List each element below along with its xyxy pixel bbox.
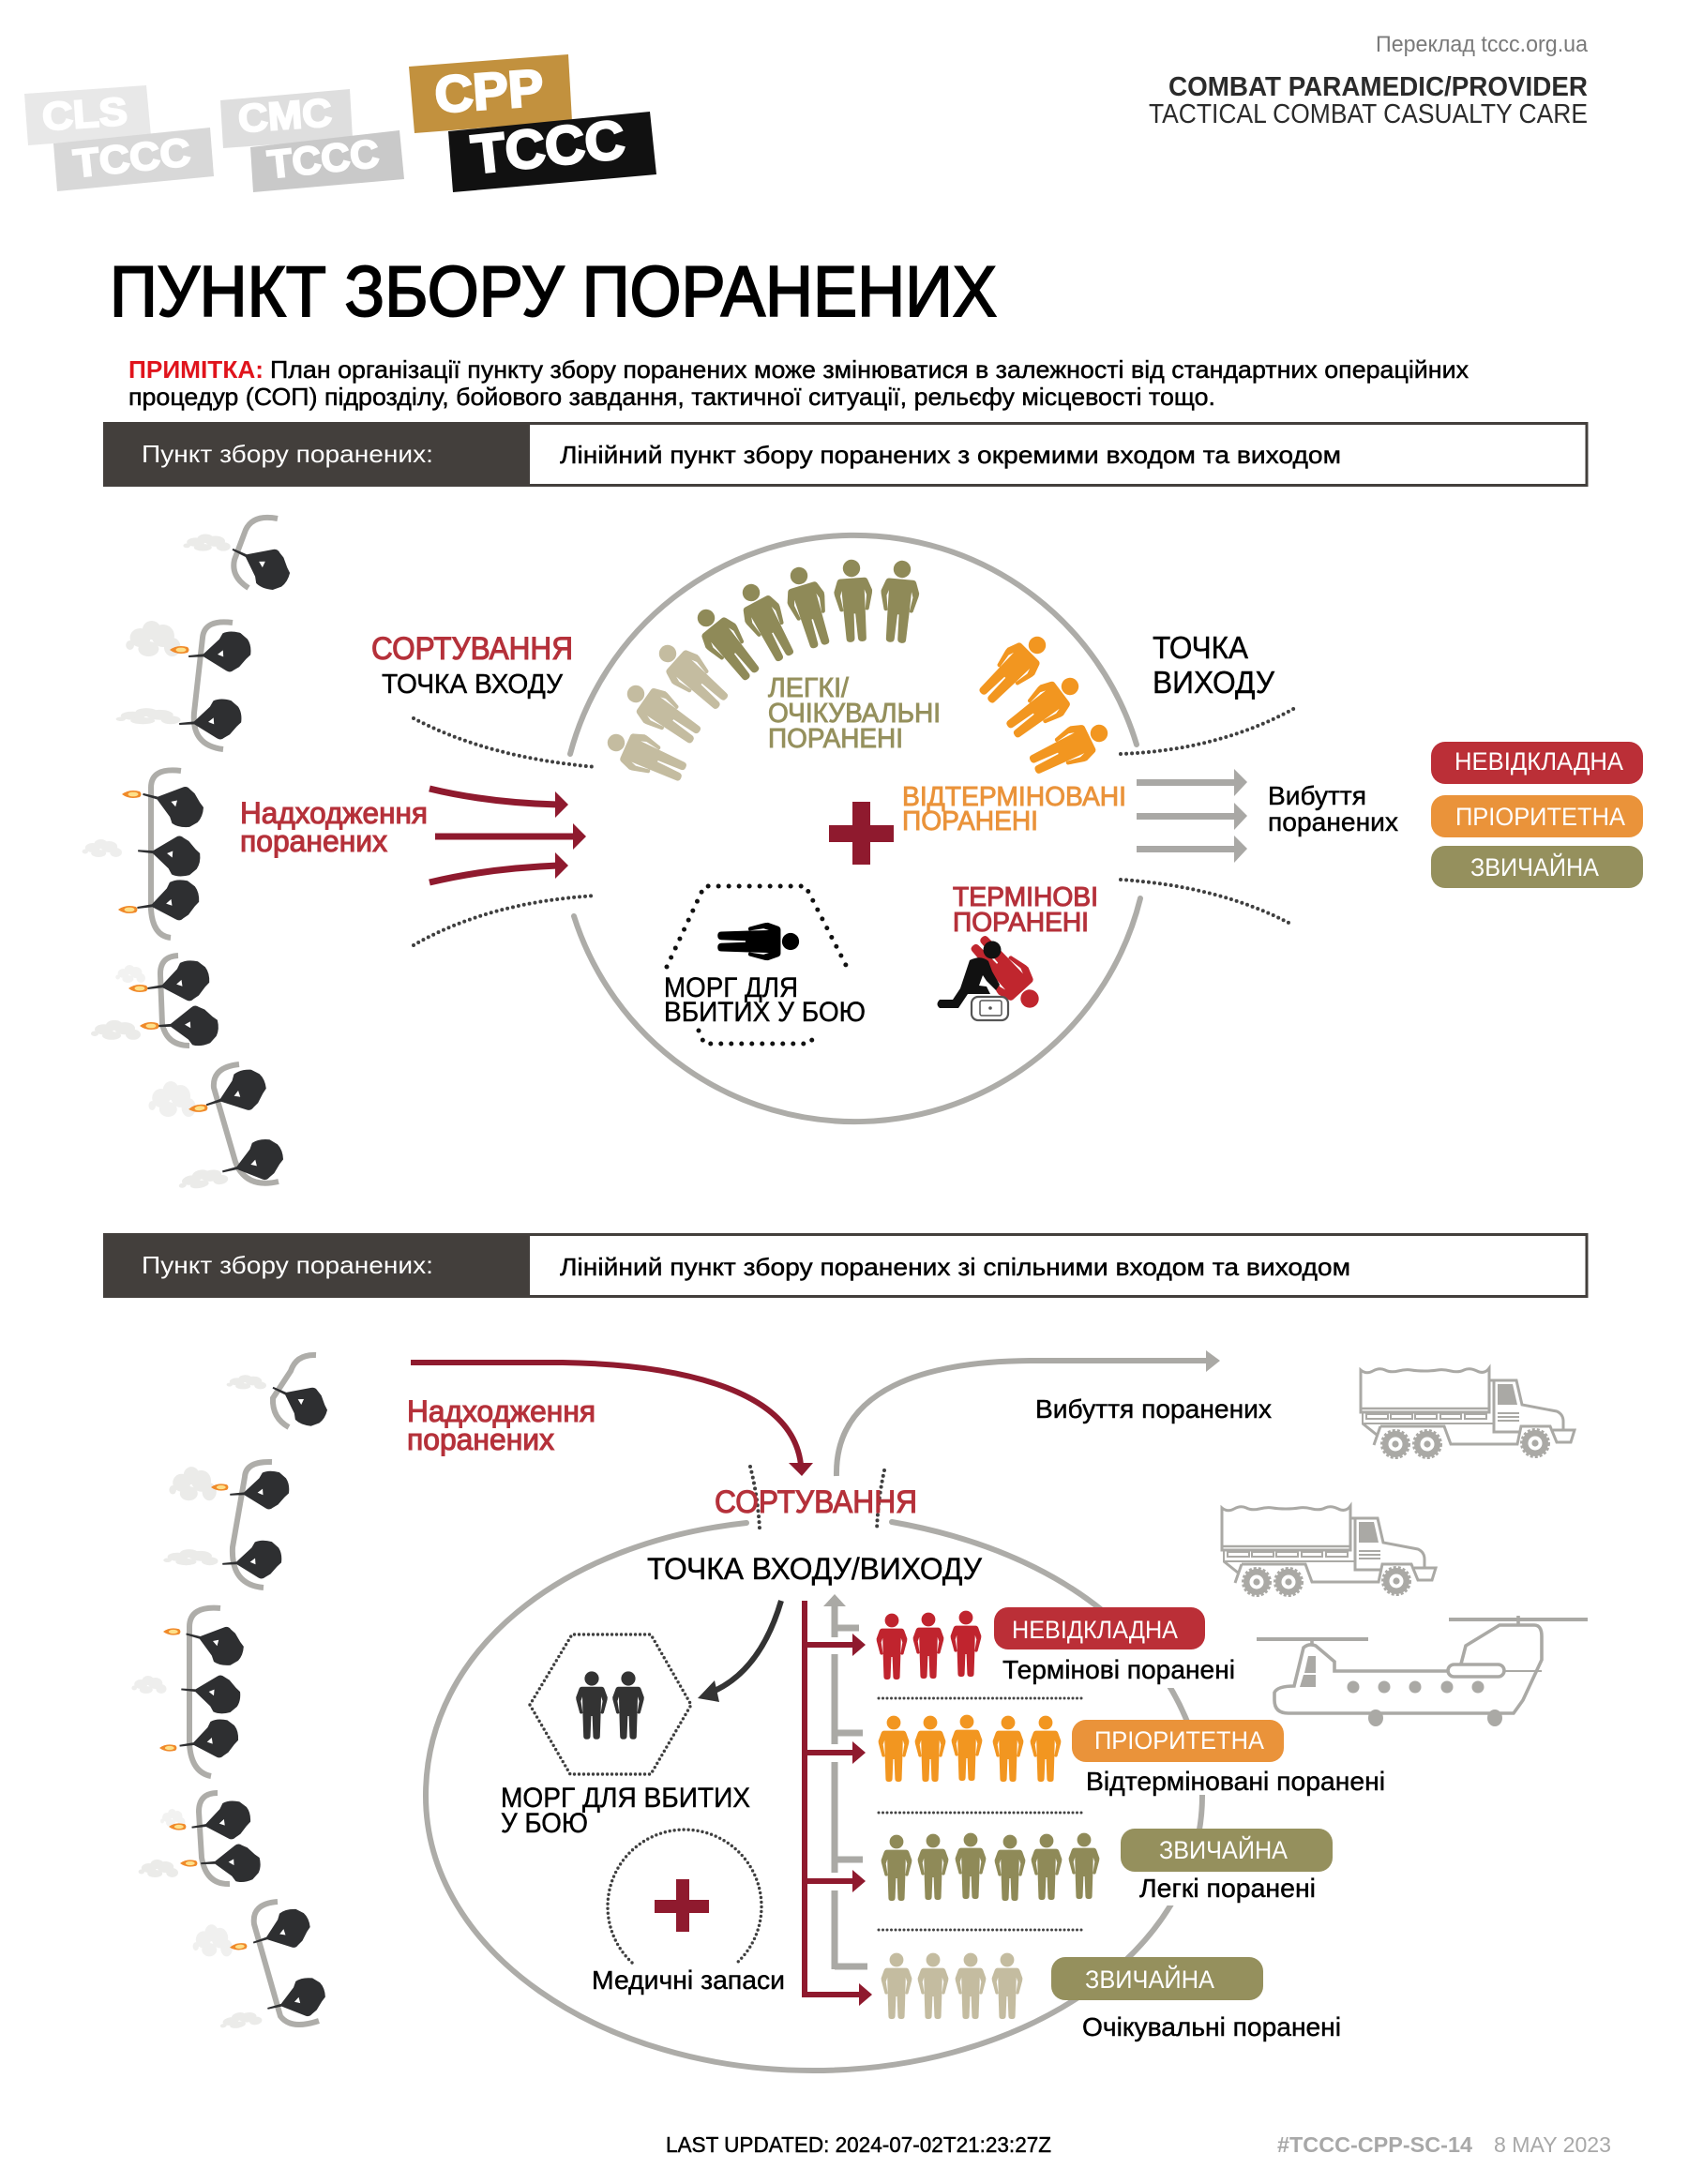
label: delayed: ПОРАНЕНІ — [902, 806, 1038, 836]
section header 1 — [103, 422, 1587, 487]
label: casualty arrival — [240, 796, 428, 858]
label: casualty arrival: поранених — [407, 1423, 554, 1456]
label: exit point: ТОЧКА — [1153, 630, 1248, 665]
label: casualty arrival: Надходження — [407, 1394, 595, 1428]
note: процедур (СОП) підрозділу, бойового завдання, тактичної ситуації, рельєфу місцевості тощо. — [128, 383, 1215, 411]
logo: CLS TCCC — [24, 85, 214, 191]
logo: CPP TCCC: TCCC — [469, 109, 627, 186]
note — [128, 355, 1469, 411]
logo: CMC TCCC — [220, 89, 404, 192]
label: immediate: ПОРАНЕНІ — [953, 908, 1089, 938]
footer: document id and date: 8 MAY 2023 — [1494, 2132, 1611, 2157]
icon: medical cross — [829, 802, 894, 865]
arrow: casualties leaving — [836, 1350, 1220, 1476]
morgue zone — [501, 1634, 750, 1839]
tag: priority: ПРІОРИТЕТНА — [1094, 1726, 1264, 1755]
logo: CPP TCCC — [409, 54, 656, 192]
morgue zone: ВБИТИХ У БОЮ — [664, 997, 866, 1028]
tag: priority — [1072, 1720, 1385, 1796]
footer: last updated: LAST UPDATED: 2024-07-02T21:23:27Z — [666, 2132, 1051, 2157]
icon: medic treating casualty — [938, 928, 1050, 1020]
logo: CPP TCCC: CPP — [433, 58, 546, 124]
label: triage entry point — [371, 631, 573, 700]
dotted entry lines — [414, 708, 1295, 945]
shooters, bottom section — [131, 1355, 334, 2031]
legend: evacuation priority: ПРІОРИТЕТНА — [1455, 803, 1625, 831]
label: minimal/expectant: ОЧІКУВАЛЬНІ — [768, 699, 941, 729]
vehicle: truck — [1361, 1368, 1575, 1457]
label: delayed — [902, 782, 1126, 836]
header: course title — [1149, 72, 1588, 129]
row: delayed casualties — [879, 1715, 1061, 1782]
circle: collection point boundary — [570, 535, 1140, 1122]
label: minimal/expectant: ЛЕГКІ/ — [768, 673, 850, 703]
figures: delayed casualties — [972, 625, 1115, 783]
dotted entry lines — [750, 1467, 884, 1530]
label: casualty departure: поранених — [1268, 807, 1398, 836]
label: triage entry point: СОРТУВАННЯ — [371, 631, 573, 667]
medical supplies zone: Медичні запаси — [592, 1966, 785, 1995]
tag: routine, minor: ЗВИЧАЙНА — [1159, 1835, 1288, 1864]
row dividers — [879, 1698, 1085, 1930]
legend: evacuation priority: ЗВИЧАЙНА — [1470, 852, 1599, 881]
label: exit point — [1153, 630, 1275, 700]
figures: minimal and expectant casualties — [600, 558, 922, 791]
logo: CLS TCCC: TCCC — [71, 129, 192, 186]
title: ПУНКТ ЗБОРУ ПОРАНЕНИХ — [110, 252, 997, 332]
note: План організації пункту збору поранених може змінюватися в залежності від стандартних операційних — [270, 355, 1469, 384]
row: immediate casualties — [877, 1611, 981, 1679]
note: ПРИМІТКА: — [128, 355, 264, 384]
section header 2: Пункт збору поранених: — [142, 1251, 433, 1279]
label: minimal/expectant — [768, 673, 941, 754]
label: exit point: ВИХОДУ — [1153, 665, 1275, 700]
logo: CMC TCCC: CMC — [236, 90, 333, 141]
tag: routine, minor: Легкі поранені — [1139, 1874, 1316, 1903]
label: casualty arrival: поранених — [240, 824, 387, 858]
footer: document id and date — [1277, 2132, 1611, 2157]
morgue zone: МОРГ ДЛЯ ВБИТИХ — [501, 1783, 750, 1814]
label: immediate — [953, 882, 1098, 938]
section header 2: Лінійний пункт збору поранених зі спільними входом та виходом — [560, 1253, 1350, 1281]
label: casualty departure: Вибуття — [1268, 781, 1366, 810]
vehicle: helicopter — [1257, 1616, 1588, 1726]
row: expectant casualties — [882, 1953, 1022, 2019]
medical supplies zone — [592, 1830, 785, 1995]
vehicle: truck — [1222, 1506, 1436, 1596]
label: entry/exit point: ТОЧКА ВХОДУ/ВИХОДУ — [647, 1552, 983, 1586]
arrows: casualties departing — [1137, 769, 1247, 863]
ellipse: collection point boundary — [426, 1522, 1202, 2071]
tag: immediate: НЕВІДКЛАДНА — [1012, 1616, 1178, 1644]
header: translation credit: Переклад tccc.org.ua — [1376, 32, 1589, 57]
label: triage entry point: ТОЧКА ВХОДУ — [382, 670, 564, 700]
header: course title: TACTICAL COMBAT CASUALTY CARE — [1149, 99, 1588, 129]
shooters, top section — [83, 518, 297, 1192]
tag: immediate: Термінові поранені — [1002, 1655, 1235, 1684]
morgue zone — [664, 886, 866, 1044]
arrow: casualties arriving — [411, 1363, 813, 1476]
label: casualty arrival — [407, 1394, 595, 1456]
legend: evacuation priority: НЕВІДКЛАДНА — [1454, 747, 1623, 776]
label: immediate: ТЕРМІНОВІ — [953, 882, 1098, 912]
section header 1: Пункт збору поранених: — [142, 440, 433, 468]
tag: routine, expectant — [1051, 1957, 1341, 2041]
tag: routine, expectant: Очікувальні поранені — [1082, 2012, 1341, 2041]
tag: routine, expectant: ЗВИЧАЙНА — [1085, 1965, 1214, 1994]
label: casualty arrival: Надходження — [240, 796, 428, 830]
tag: immediate — [994, 1607, 1235, 1684]
label: triage: СОРТУВАННЯ — [715, 1484, 917, 1520]
row: minor casualties — [882, 1833, 1099, 1901]
tag: routine, minor — [1121, 1829, 1333, 1903]
label: delayed: ВІДТЕРМІНОВАНІ — [902, 782, 1126, 812]
arrows: casualties entering — [430, 789, 586, 882]
morgue zone: МОРГ ДЛЯ — [664, 972, 798, 1003]
grey return line — [823, 1594, 867, 1969]
morgue zone: У БОЮ — [501, 1808, 588, 1839]
legend: evacuation priority — [1431, 742, 1643, 888]
logo: CMC TCCC: TCCC — [265, 131, 381, 187]
section header 2 — [103, 1233, 1587, 1298]
tag: priority: Відтерміновані поранені — [1086, 1767, 1385, 1796]
logo: CLS TCCC: CLS — [40, 89, 128, 139]
label: minimal/expectant: ПОРАНЕНІ — [768, 724, 903, 754]
footer: document id and date: #TCCC-CPP-SC-14 — [1277, 2132, 1472, 2157]
section header 1: Лінійний пункт збору поранених з окремими входом та виходом — [560, 441, 1341, 469]
label: casualty departure — [1268, 781, 1398, 836]
label: casualty departure: Вибуття поранених — [1035, 1394, 1272, 1423]
arrow: to morgue — [698, 1601, 781, 1702]
header: course title: COMBAT PARAMEDIC/PROVIDER — [1168, 72, 1588, 102]
red distribution line — [805, 1601, 872, 2006]
